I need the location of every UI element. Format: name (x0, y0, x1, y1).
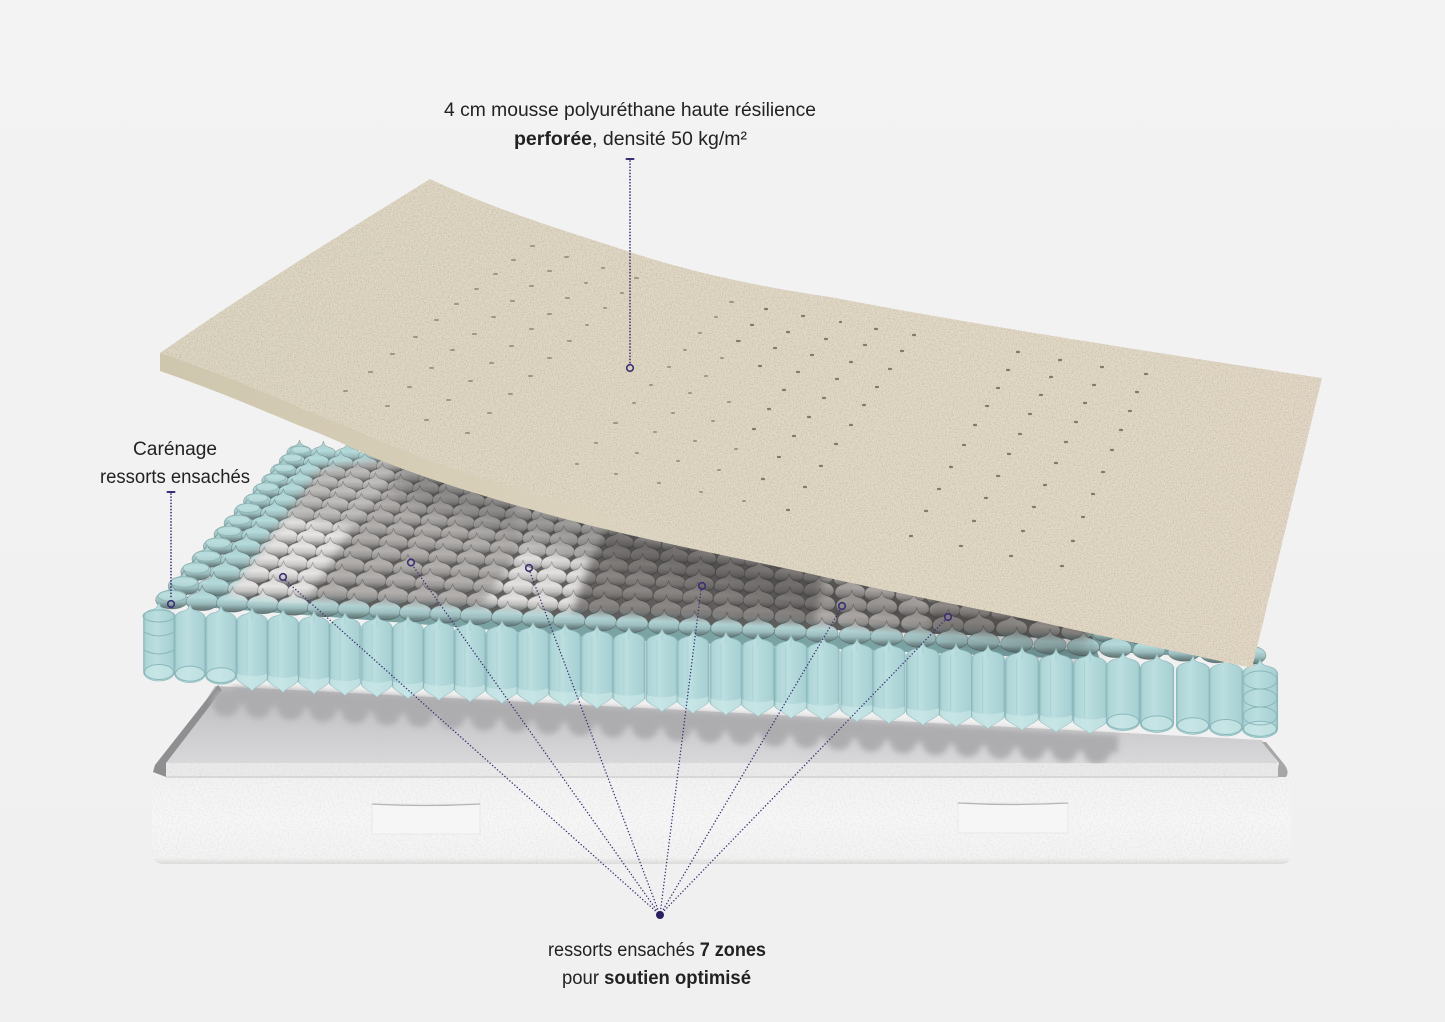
left handle (372, 804, 480, 834)
foam layer (160, 179, 1322, 668)
light zone two (482, 550, 600, 612)
spring gaps undercoat (190, 458, 1250, 660)
label: seven zones: ressorts ensachés 7 zones (548, 940, 766, 961)
third lighter zone (816, 578, 928, 628)
heading: foam: 4 cm mousse polyuréthane haute résilience (444, 100, 816, 121)
label: casing: Carénage (133, 439, 217, 460)
front face of the base (152, 777, 1291, 864)
mid-light zone (515, 506, 603, 558)
shadow cast by springs (226, 695, 1124, 752)
grey top surface of the base (166, 686, 1278, 763)
second dark zone (930, 600, 1089, 640)
dark zone (572, 530, 825, 624)
foam top surface (160, 179, 1322, 668)
upper left zone (293, 468, 394, 525)
callout lines (168, 159, 951, 919)
casing zone (156, 440, 1266, 664)
exposed coils at the ends (143, 610, 1277, 725)
foam front side (160, 353, 720, 553)
label: seven zones: pour soutien optimisé (562, 968, 751, 989)
right grey edge strip (1262, 742, 1288, 777)
heading: foam: perforée, densité 50 kg/m² (514, 129, 747, 150)
outer ring column (158, 446, 310, 602)
base mattress (152, 685, 1291, 864)
front row of springs (144, 602, 1278, 738)
left grey edge strip (153, 685, 222, 777)
foam leader line (626, 159, 634, 371)
zones fan of leader lines (280, 559, 951, 919)
label: casing: ressorts ensachés (100, 467, 250, 488)
label: seven zones (548, 940, 766, 989)
perforations right (737, 309, 1147, 566)
casing leader line (168, 492, 174, 607)
right handle (958, 803, 1068, 833)
pocket spring unit (142, 440, 1278, 738)
heading: foam (444, 100, 816, 150)
shade under foam on the spring tops (400, 478, 1090, 650)
seam shadow under quilted border (166, 776, 1278, 778)
label: casing (100, 439, 250, 488)
zone colours on the spring tops (156, 440, 1266, 664)
mid firmness zone (272, 457, 891, 630)
quilted border (166, 763, 1278, 778)
spring top bulbs (156, 440, 1266, 665)
perforations left (344, 246, 745, 501)
light zone one (226, 516, 352, 602)
